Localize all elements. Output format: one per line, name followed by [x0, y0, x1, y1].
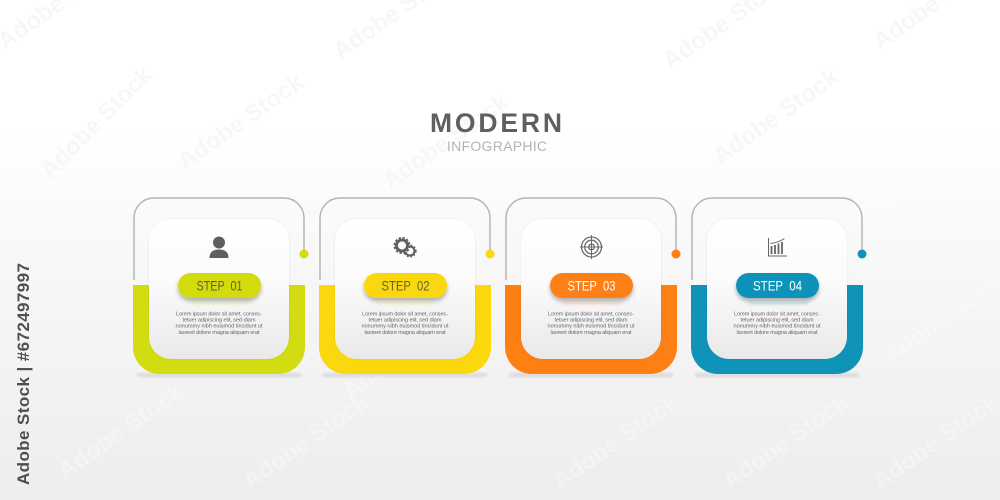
- coloured frame: [133, 285, 305, 374]
- heading: MODERN: MODERN: [430, 108, 562, 138]
- step pill: STEP 04: [753, 278, 802, 294]
- watermark pattern: Adobe Stock: [338, 298, 474, 405]
- coloured frame: [691, 285, 863, 374]
- base shadow: [695, 374, 859, 376]
- body text: [734, 312, 821, 336]
- body text: nonummy nibh euismod tincidunt ut: [362, 324, 449, 330]
- inner card: [707, 219, 847, 359]
- panel: step 01: [133, 198, 308, 376]
- step pill: STEP 02: [382, 278, 430, 294]
- body text: laoreet dolore magna aliquam erat: [178, 330, 260, 336]
- subheading: INFOGRAPHIC: INFOGRAPHIC: [447, 138, 547, 154]
- step pill: [364, 273, 447, 304]
- icon: bar chart: [768, 238, 787, 256]
- body text: [176, 312, 263, 336]
- base shadow: [509, 374, 673, 376]
- body text: nonummy nibh euismod tincidunt ut: [548, 324, 635, 330]
- base shadow: [137, 374, 301, 376]
- stock id caption: Adobe Stock | #672497997: [14, 263, 33, 485]
- panel: step 02: [319, 198, 494, 376]
- connector dot: [486, 250, 494, 258]
- watermark pattern: Adobe Stock: [378, 88, 514, 195]
- step pill: [178, 273, 261, 304]
- icon: person: [210, 236, 228, 258]
- body text: [362, 312, 449, 336]
- body text: Lorem ipsum dolor sit amet, consec-: [734, 312, 820, 318]
- body text: laoreet dolore magna aliquam erat: [736, 330, 818, 336]
- outline connector: [692, 198, 862, 280]
- panel: step 03: [505, 198, 680, 376]
- inner card: [149, 219, 289, 359]
- step pill: STEP 03: [568, 278, 616, 294]
- body text: tetuer adipiscing elit, sed diam: [740, 318, 814, 324]
- watermark pattern: Adobe Stock: [718, 388, 854, 495]
- watermark pattern: Adobe Stock: [848, 123, 984, 230]
- step pill: [736, 273, 819, 304]
- base shadow: [323, 374, 487, 376]
- inner card: [521, 219, 661, 359]
- connector dot: [672, 250, 680, 258]
- watermark pattern: Adobe Stock: [173, 68, 309, 175]
- watermark pattern: Adobe Stock: [53, 378, 189, 485]
- body text: laoreet dolore magna aliquam erat: [550, 330, 632, 336]
- title: [430, 108, 562, 154]
- outline connector: [134, 198, 304, 280]
- watermark pattern: Adobe Stock: [868, 388, 1000, 495]
- coloured frame: [319, 285, 491, 374]
- inner card: [335, 219, 475, 359]
- body text: tetuer adipiscing elit, sed diam: [554, 318, 628, 324]
- body text: Lorem ipsum dolor sit amet, consec-: [362, 312, 448, 318]
- body text: nonummy nibh euismod tincidunt ut: [176, 324, 263, 330]
- connector dot: [858, 250, 866, 258]
- body text: nonummy nibh euismod tincidunt ut: [734, 324, 821, 330]
- body text: tetuer adipiscing elit, sed diam: [368, 318, 442, 324]
- panel: step 04: [691, 198, 866, 376]
- icon: target: [580, 235, 603, 259]
- icon: gears: [394, 238, 416, 257]
- watermark pattern: Adobe Stock: [548, 388, 684, 495]
- step pill: [550, 273, 633, 304]
- watermark pattern: Adobe Stock: [35, 61, 158, 184]
- body text: tetuer adipiscing elit, sed diam: [182, 318, 256, 324]
- outline connector: [320, 198, 490, 280]
- body text: Lorem ipsum dolor sit amet, consec-: [176, 312, 262, 318]
- connector dot: [300, 250, 308, 258]
- watermark pattern: Adobe Stock: [708, 63, 844, 170]
- body text: laoreet dolore magna aliquam erat: [364, 330, 446, 336]
- coloured frame: [505, 285, 677, 374]
- step pill: STEP 01: [196, 278, 242, 294]
- watermark pattern: Adobe Stock: [238, 388, 374, 495]
- body text: [548, 312, 635, 336]
- body text: Lorem ipsum dolor sit amet, consec-: [548, 312, 634, 318]
- outline connector: [506, 198, 676, 280]
